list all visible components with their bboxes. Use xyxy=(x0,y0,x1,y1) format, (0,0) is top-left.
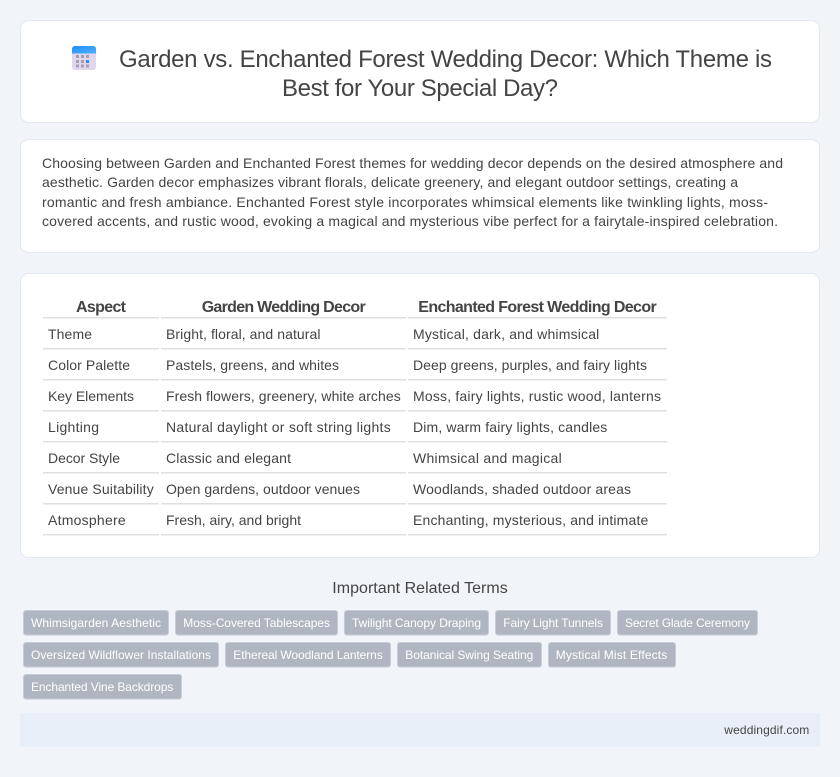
tag: Fairy Light Tunnels xyxy=(503,616,603,630)
tag: Botanical Swing Seating xyxy=(405,648,533,662)
tag: Secret Glade Ceremony xyxy=(625,616,750,630)
intro text xyxy=(42,155,783,229)
table header row xyxy=(76,299,657,316)
tag: Mystical Mist Effects xyxy=(556,648,667,662)
tag: Ethereal Woodland Lanterns xyxy=(233,648,383,662)
title xyxy=(119,46,772,102)
related terms tags xyxy=(24,610,758,699)
row: color palette xyxy=(48,357,647,373)
row: theme: Theme xyxy=(48,326,92,342)
row: theme xyxy=(48,326,599,342)
tag: Twilight Canopy Draping xyxy=(352,616,481,630)
tag xyxy=(176,610,338,635)
intro text: aesthetic. Garden decor emphasizes vibrant florals, delicate greenery, and elegant outdoor settings, creating a xyxy=(42,174,738,190)
row: lighting xyxy=(48,419,607,435)
table header row: Enchanted Forest Wedding Decor xyxy=(418,299,657,316)
intro text: romantic and fresh ambiance. Enchanted Forest style incorporates whimsical elements like twinkling lights, moss- xyxy=(42,194,768,210)
tag xyxy=(496,610,610,635)
row: lighting: Dim, warm fairy lights, candles xyxy=(413,419,607,435)
tag xyxy=(226,642,390,667)
tag xyxy=(344,610,488,635)
tag: Whimsigarden Aesthetic xyxy=(31,616,161,630)
title: Best for Your Special Day? xyxy=(282,75,558,102)
row: key elements: Key Elements xyxy=(48,388,134,404)
tag xyxy=(24,642,218,667)
intro panel xyxy=(20,140,820,252)
tag: Oversized Wildflower Installations xyxy=(31,648,211,662)
tag: Moss-Covered Tablescapes xyxy=(183,616,330,630)
row: atmosphere: Fresh, airy, and bright xyxy=(166,512,301,528)
row: atmosphere xyxy=(48,512,649,528)
row: venue suitability: Venue Suitability xyxy=(48,481,154,497)
header panel xyxy=(20,20,820,122)
row: venue suitability xyxy=(48,481,631,497)
tag xyxy=(398,642,542,667)
row: lighting: Natural daylight or soft string lights xyxy=(166,419,391,435)
table header row: Aspect xyxy=(76,299,127,316)
row: atmosphere: Enchanting, mysterious, and intimate xyxy=(413,512,649,528)
title: Garden vs. Enchanted Forest Wedding Decor: Which Theme is xyxy=(119,46,772,73)
row: decor style xyxy=(48,450,562,466)
tag xyxy=(24,674,182,699)
related terms heading: Important Related Terms xyxy=(332,580,508,597)
row: color palette: Color Palette xyxy=(48,357,130,373)
tag xyxy=(618,610,758,635)
intro text: covered accents, and rustic wood, evoking a magical and mysterious vibe perfect for a fairytale-inspired celebration. xyxy=(42,213,778,229)
footer bar xyxy=(20,713,820,747)
row: venue suitability: Open gardens, outdoor venues xyxy=(166,481,360,497)
row: key elements: Fresh flowers, greenery, white arches xyxy=(166,388,401,404)
row: theme: Mystical, dark, and whimsical xyxy=(413,326,599,342)
row: color palette: Deep greens, purples, and fairy lights xyxy=(413,357,647,373)
footer source text: weddingdif.com xyxy=(723,723,809,737)
row: decor style: Decor Style xyxy=(48,450,120,466)
row: lighting: Lighting xyxy=(48,419,99,435)
intro text: Choosing between Garden and Enchanted Forest themes for wedding decor depends on the desired atmosphere and xyxy=(42,155,783,171)
row: atmosphere: Atmosphere xyxy=(48,512,126,528)
tag: Enchanted Vine Backdrops xyxy=(31,680,173,694)
row: key elements xyxy=(48,388,661,404)
tag xyxy=(24,610,168,635)
comparison table xyxy=(43,299,667,536)
row: decor style: Whimsical and magical xyxy=(413,450,562,466)
tag xyxy=(548,642,676,667)
table panel xyxy=(20,274,820,558)
row: theme: Bright, floral, and natural xyxy=(166,326,320,342)
row: venue suitability: Woodlands, shaded outdoor areas xyxy=(413,481,631,497)
icon: calendar xyxy=(72,46,96,70)
row: key elements: Moss, fairy lights, rustic wood, lanterns xyxy=(413,388,661,404)
row: color palette: Pastels, greens, and whites xyxy=(166,357,339,373)
table header row: Garden Wedding Decor xyxy=(202,299,366,316)
row: decor style: Classic and elegant xyxy=(166,450,291,466)
